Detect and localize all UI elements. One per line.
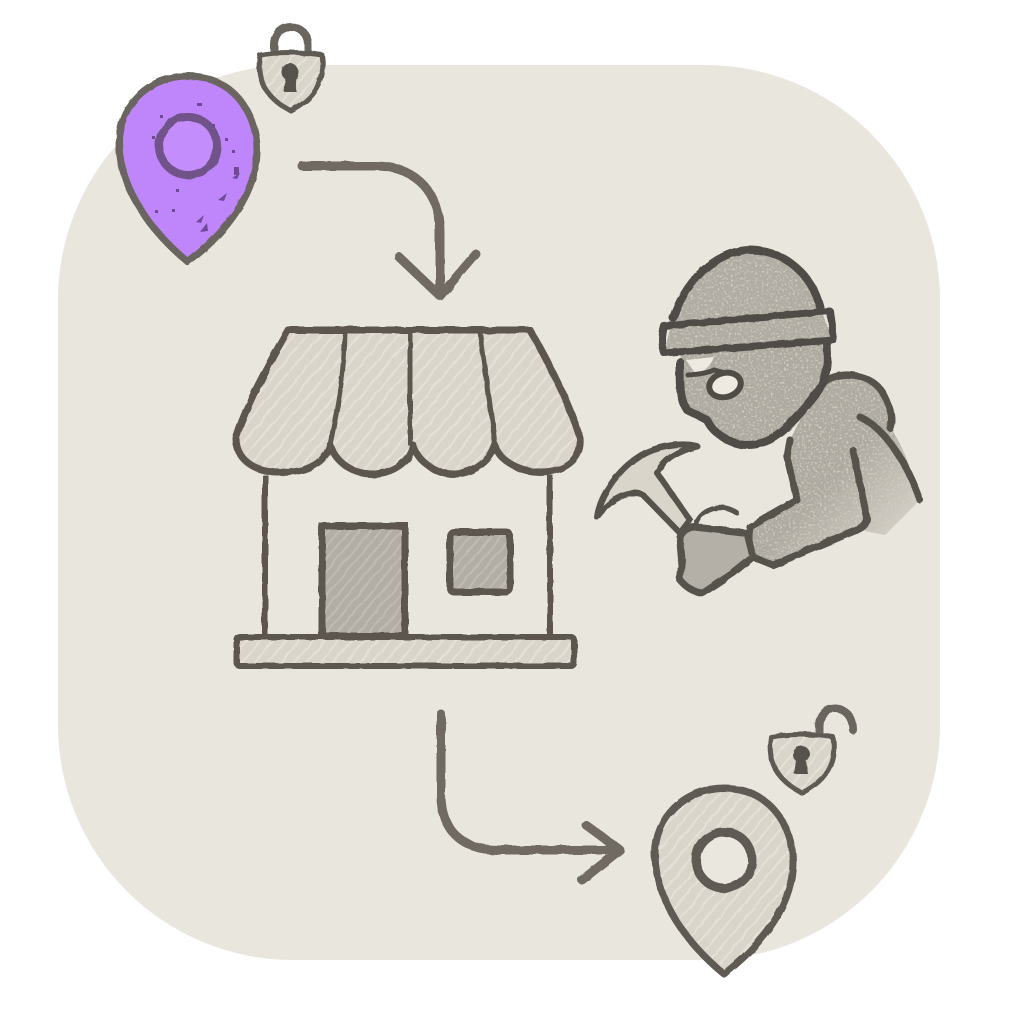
pin speckles bbox=[152, 103, 240, 232]
burglar hand bbox=[680, 508, 753, 593]
beanie outline bbox=[673, 250, 820, 318]
icon: purple location pin (start) bbox=[119, 76, 257, 262]
burglar hammer bbox=[597, 444, 697, 533]
arrow: store to unlocked pin bbox=[441, 714, 620, 880]
store walls bbox=[265, 475, 550, 636]
icon: closed padlock bbox=[259, 27, 323, 111]
burglar eye bbox=[706, 369, 744, 401]
burglar brow highlight bbox=[686, 357, 714, 373]
burglar brow line bbox=[688, 370, 736, 376]
store door bbox=[322, 526, 405, 636]
store window bbox=[450, 532, 510, 592]
arrow: pin to store bbox=[302, 166, 476, 296]
burglar head bbox=[664, 250, 832, 445]
background rounded panel bbox=[58, 65, 940, 960]
icon: burglar with hammer bbox=[597, 250, 920, 593]
icon: open padlock bbox=[770, 708, 853, 793]
burglar body bbox=[750, 375, 920, 565]
store awning bbox=[236, 330, 580, 474]
icon: store bbox=[236, 330, 580, 666]
store base bbox=[237, 637, 574, 666]
icon: grey location pin (destination) bbox=[655, 788, 793, 974]
face outline bbox=[680, 345, 827, 445]
